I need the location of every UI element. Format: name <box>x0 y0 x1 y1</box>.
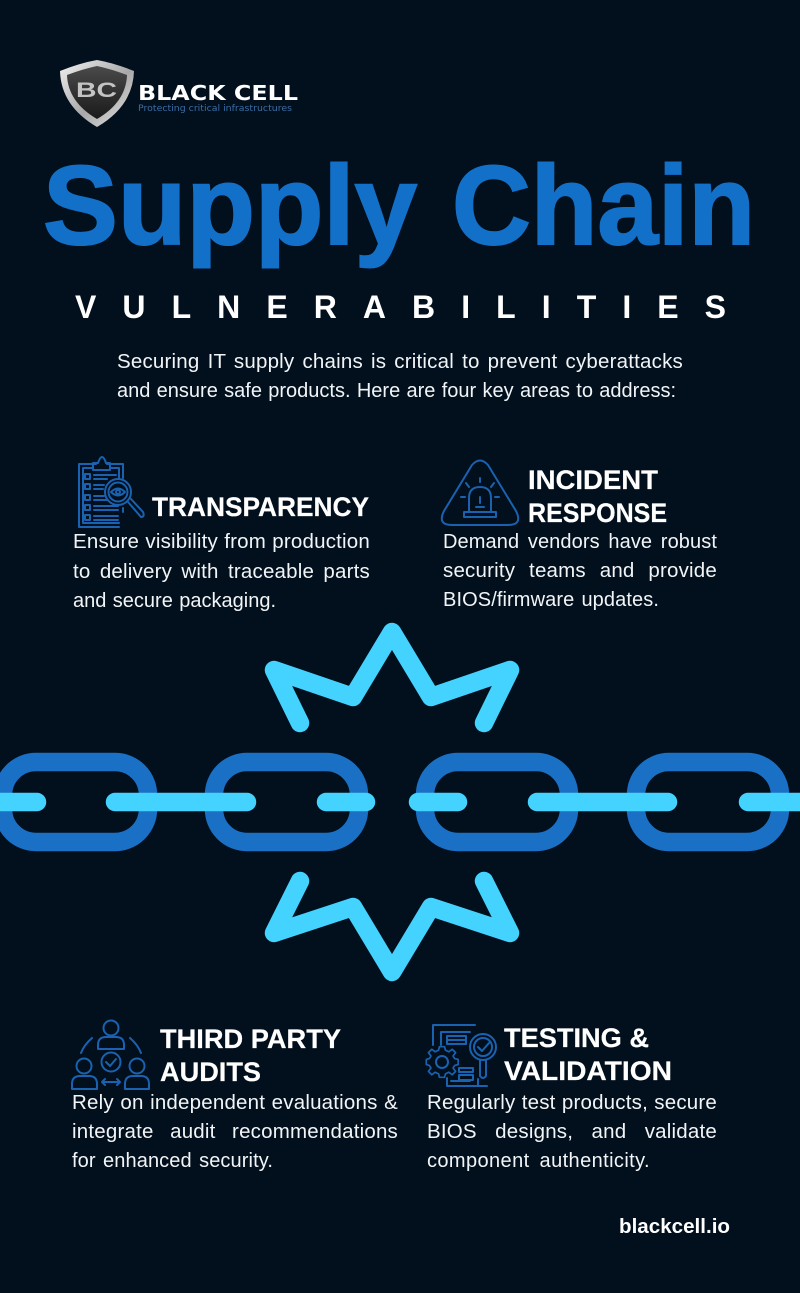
panel: testing and validation: BIOS designs, and validate <box>427 1120 717 1143</box>
heading: incident response: RESPONSE <box>528 498 667 528</box>
panel: incident response: BIOS/firmware updates. <box>443 589 659 611</box>
panel: third party audits <box>71 1020 398 1172</box>
title: Supply Chain: Supply <box>43 143 417 268</box>
title: Supply Chain <box>43 143 755 268</box>
panel: incident response: Demand vendors have robust <box>443 531 717 553</box>
burst: bottom <box>274 881 510 972</box>
panel: third party audits: integrate audit recommendations <box>72 1120 398 1143</box>
title: Supply Chain: Chain <box>452 143 755 268</box>
chain links <box>3 762 780 842</box>
logo: Black Cell: BLACK CELL <box>138 81 298 105</box>
heading: third party audits: AUDITS <box>160 1057 261 1087</box>
chain graphic: broken chain with burst <box>0 622 800 982</box>
logo: Black Cell: Protecting critical infrastructures <box>138 104 293 114</box>
heading: testing and validation: VALIDATION <box>504 1056 672 1086</box>
heading: third party audits <box>160 1024 341 1087</box>
panel: testing and validation <box>425 1023 717 1172</box>
panel: third party audits: Rely on independent evaluations & <box>72 1091 398 1114</box>
panel: testing and validation: component authenticity. <box>427 1150 650 1172</box>
icon: document, gear and magnifier <box>426 1025 496 1086</box>
panel: transparency <box>73 456 370 612</box>
subtitle: Vulnerabilities: VULNERABILITIES <box>75 289 726 325</box>
panel: incident response <box>440 460 717 611</box>
panel: incident response: security teams and provide <box>443 559 717 582</box>
icon: people with check <box>72 1020 149 1089</box>
icon: alarm in triangle <box>442 460 518 525</box>
intro text: Securing IT supply chains is critical to prevent cyberattacks <box>117 350 683 373</box>
heading: incident response <box>528 465 667 528</box>
heading: testing and validation: TESTING & <box>504 1023 649 1053</box>
chain connector bars <box>0 793 800 811</box>
panel: testing and validation: Regularly test products, secure <box>427 1091 717 1114</box>
heading: transparency: TRANSPARENCY <box>152 492 369 522</box>
intro text <box>117 350 683 402</box>
intro text: and ensure safe products. Here are four key areas to address: <box>117 380 676 402</box>
panel: transparency: Ensure visibility from production <box>73 530 370 553</box>
panel: third party audits: for enhanced security. <box>72 1150 273 1172</box>
logo: Black Cell <box>60 60 298 127</box>
icon: clipboard with magnifier <box>79 457 144 527</box>
heading: third party audits: THIRD PARTY <box>160 1024 341 1054</box>
panel: transparency: to delivery with traceable parts <box>73 560 370 583</box>
heading: testing and validation <box>504 1023 672 1086</box>
heading: incident response: INCIDENT <box>528 465 659 495</box>
burst: top <box>274 632 510 723</box>
website footer: blackcell.io <box>619 1216 730 1238</box>
panel: transparency: and secure packaging. <box>73 590 276 612</box>
logo: Black Cell: BC <box>76 79 117 102</box>
